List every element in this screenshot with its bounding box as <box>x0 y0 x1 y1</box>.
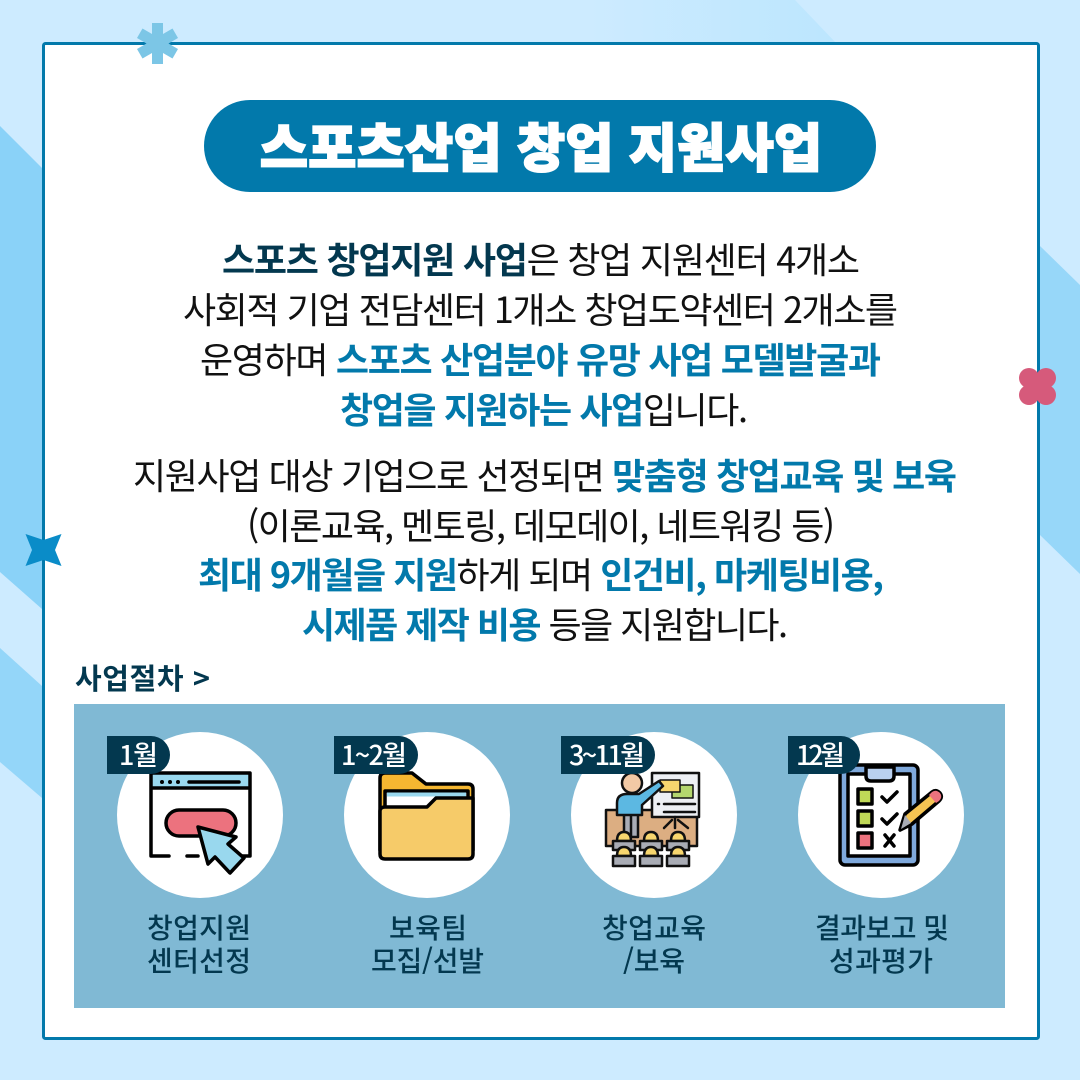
icon: folder <box>380 773 473 859</box>
intro paragraph: 사회적 기업 전담센터 1개소 창업도약센터 2개소를 <box>183 282 898 334</box>
icon: presenter <box>606 773 699 866</box>
step 4 <box>788 732 964 898</box>
icon: browser with cursor <box>151 773 250 873</box>
decoration: four-point star <box>26 534 62 566</box>
step labels: 센터선정 <box>147 940 251 980</box>
step labels: 모집/선발 <box>371 940 484 980</box>
badge <box>107 736 170 774</box>
step labels: 보육팀 <box>389 907 467 947</box>
step 3 <box>561 732 737 898</box>
support paragraph <box>133 448 957 649</box>
support paragraph: 지원사업 대상 기업으로 선정되면 맞춤형 창업교육 및 보육 <box>133 448 957 500</box>
month: 1~2월 <box>341 734 407 773</box>
step labels: /보육 <box>623 940 685 980</box>
icon: checklist <box>840 765 941 865</box>
support paragraph: 최대 9개월을 지원하게 되며 인건비, 마케팅비용, <box>198 547 884 599</box>
step 1 <box>107 732 283 898</box>
intro paragraph <box>183 232 898 434</box>
intro paragraph: 스포츠 창업지원 사업은 창업 지원센터 4개소 <box>222 232 860 284</box>
badge <box>334 736 418 774</box>
process panel <box>74 704 1005 1008</box>
section heading: 사업절차 > <box>75 656 210 698</box>
decoration: asterisk <box>137 23 178 64</box>
title pill <box>204 100 876 192</box>
intro paragraph: 창업을 지원하는 사업입니다. <box>340 382 748 434</box>
support paragraph: 시제품 제작 비용 등을 지원합니다. <box>302 597 788 649</box>
month: 3~11월 <box>569 734 645 773</box>
support paragraph: (이론교육, 멘토링, 데모데이, 네트워킹 등) <box>247 498 835 550</box>
intro paragraph: 운영하며 스포츠 산업분야 유망 사업 모델발굴과 <box>200 332 881 384</box>
decoration: pink flower <box>1019 368 1056 405</box>
step labels <box>147 907 949 980</box>
step 2 <box>334 732 510 898</box>
step labels: 결과보고 및 <box>815 907 949 947</box>
step labels: 성과평가 <box>829 940 933 980</box>
badge <box>561 736 655 774</box>
month: 1월 <box>119 734 158 773</box>
month: 12월 <box>796 734 845 773</box>
step labels: 창업교육 <box>602 907 706 947</box>
step labels: 창업지원 <box>147 907 251 947</box>
badge <box>788 736 860 774</box>
title: 스포츠산업 창업 지원사업 <box>260 107 822 182</box>
